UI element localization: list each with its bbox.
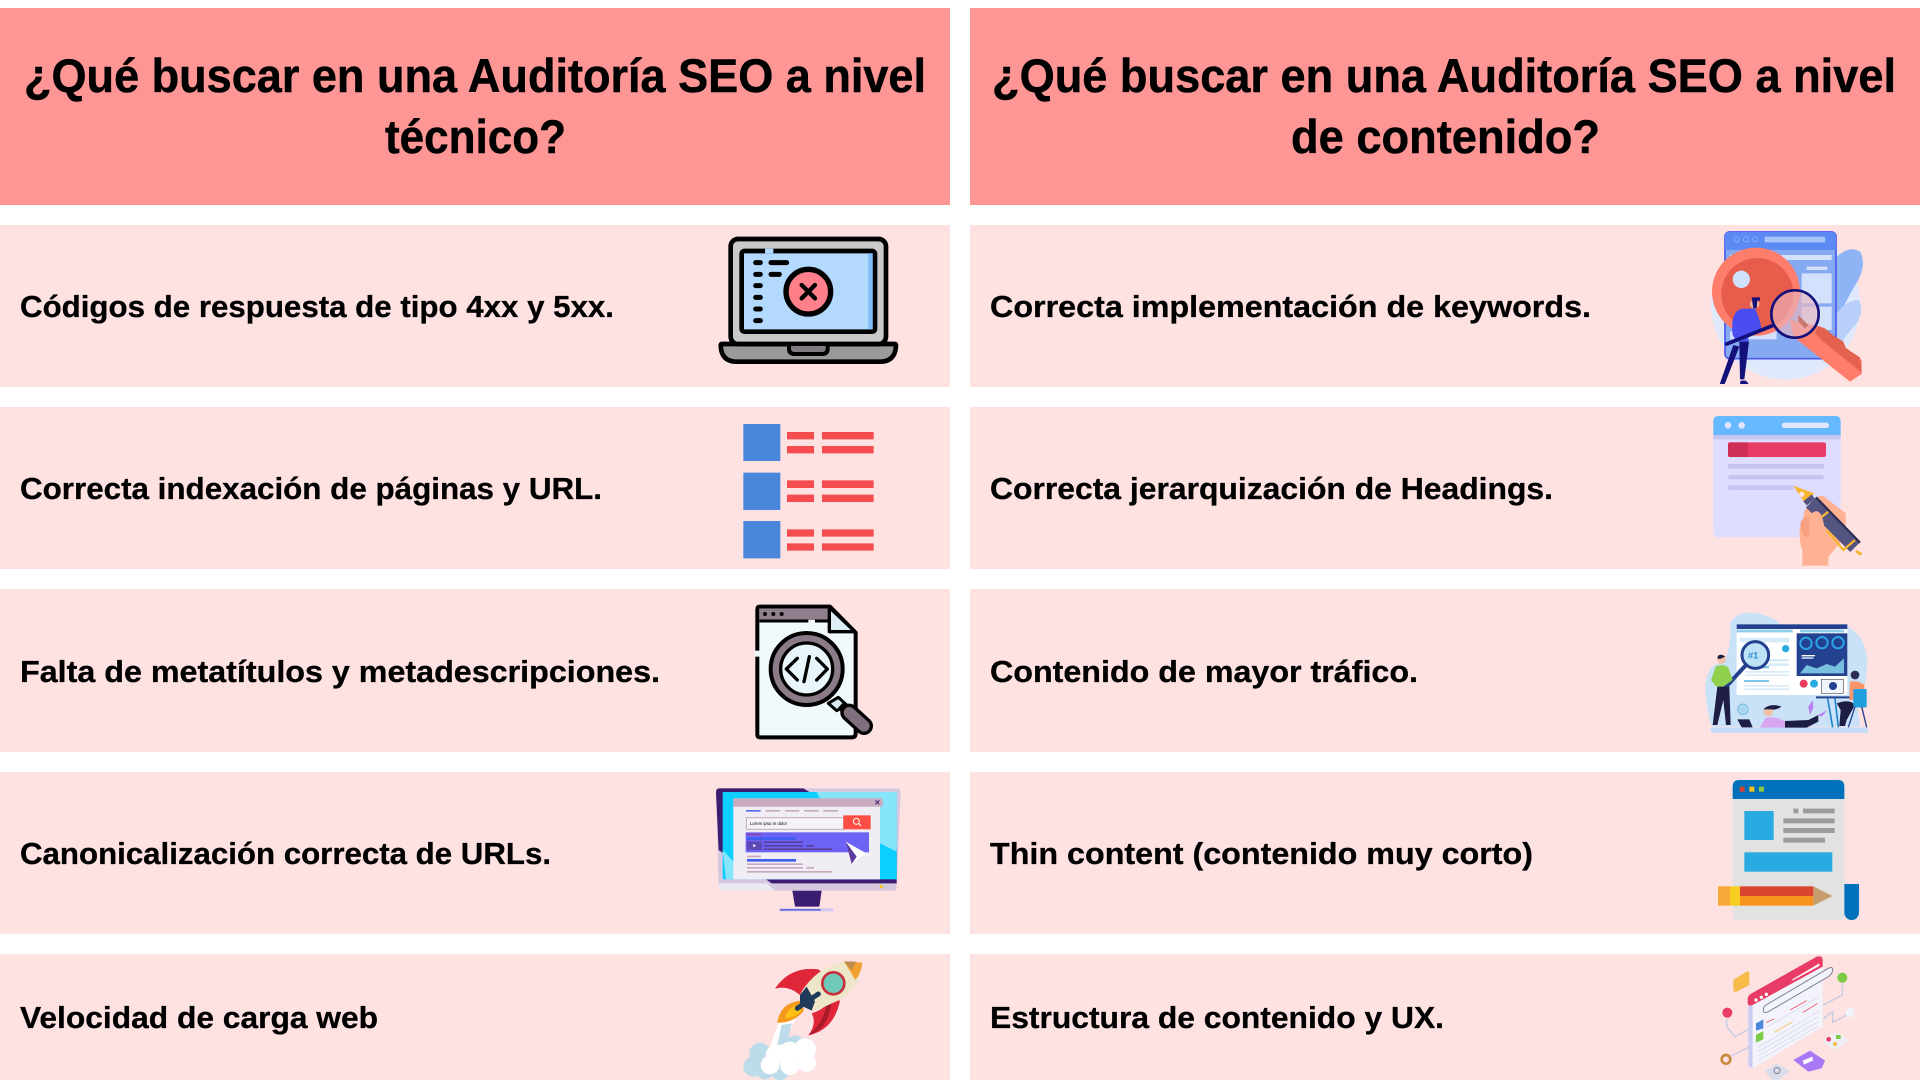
- row: response codes: [0, 225, 950, 387]
- row: thin content: Thin content (contenido muy corto): [990, 836, 1533, 871]
- row: keywords: [970, 225, 1920, 387]
- icon: key and magnifier: [1711, 230, 1863, 384]
- row: keywords: Correcta implementación de keywords.: [990, 289, 1591, 324]
- row: indexing: Correcta indexación de páginas y URL.: [20, 471, 602, 506]
- row: meta titles: [0, 589, 950, 752]
- icon: ranking dashboard team: [1705, 613, 1868, 733]
- icon: page and pen: [1713, 416, 1863, 566]
- row: high traffic content: Contenido de mayor tráfico.: [990, 654, 1418, 689]
- panel: technical audit heading: [0, 8, 950, 205]
- panel: content audit heading: [970, 8, 1920, 205]
- icon: laptop with error: [721, 239, 896, 362]
- icon: isometric browser page: [1722, 956, 1855, 1080]
- panel: content audit heading: de contenido?: [1291, 110, 1600, 163]
- row: canonicalization: Canonicalización correcta de URLs.: [20, 836, 551, 871]
- icon: code document magnifier: [757, 607, 864, 737]
- icon: list of pages: [743, 424, 874, 558]
- panel: content audit heading: ¿Qué buscar en una Auditoría SEO a nivel: [992, 49, 1896, 102]
- icon: rocket launch: [743, 961, 862, 1080]
- row: high traffic content: [970, 589, 1920, 752]
- row: structure and UX: [970, 954, 1920, 1080]
- row: response codes: Códigos de respuesta de tipo 4xx y 5xx.: [20, 289, 614, 324]
- row: headings: Correcta jerarquización de Headings.: [990, 471, 1553, 506]
- row: indexing: [0, 407, 950, 569]
- row: meta titles: Falta de metatítulos y metadescripciones.: [20, 654, 660, 689]
- row: headings: [970, 407, 1920, 569]
- panel: technical audit heading: técnico?: [385, 110, 566, 163]
- row: canonicalization: [0, 772, 950, 934]
- icon: document and pencil: [1718, 780, 1859, 920]
- icon: ranking dashboard team: #1: [1748, 650, 1758, 660]
- row: structure and UX: Estructura de contenido y UX.: [990, 1000, 1444, 1035]
- row: thin content: [970, 772, 1920, 934]
- icon: monitor with search page: [716, 788, 901, 911]
- row: load speed: Velocidad de carga web: [20, 1000, 378, 1035]
- panel: technical audit heading: ¿Qué buscar en una Auditoría SEO a nivel: [24, 49, 926, 102]
- row: load speed: [0, 954, 950, 1080]
- icon: monitor with search page: Lorem ipsu m dolor: [750, 821, 788, 826]
